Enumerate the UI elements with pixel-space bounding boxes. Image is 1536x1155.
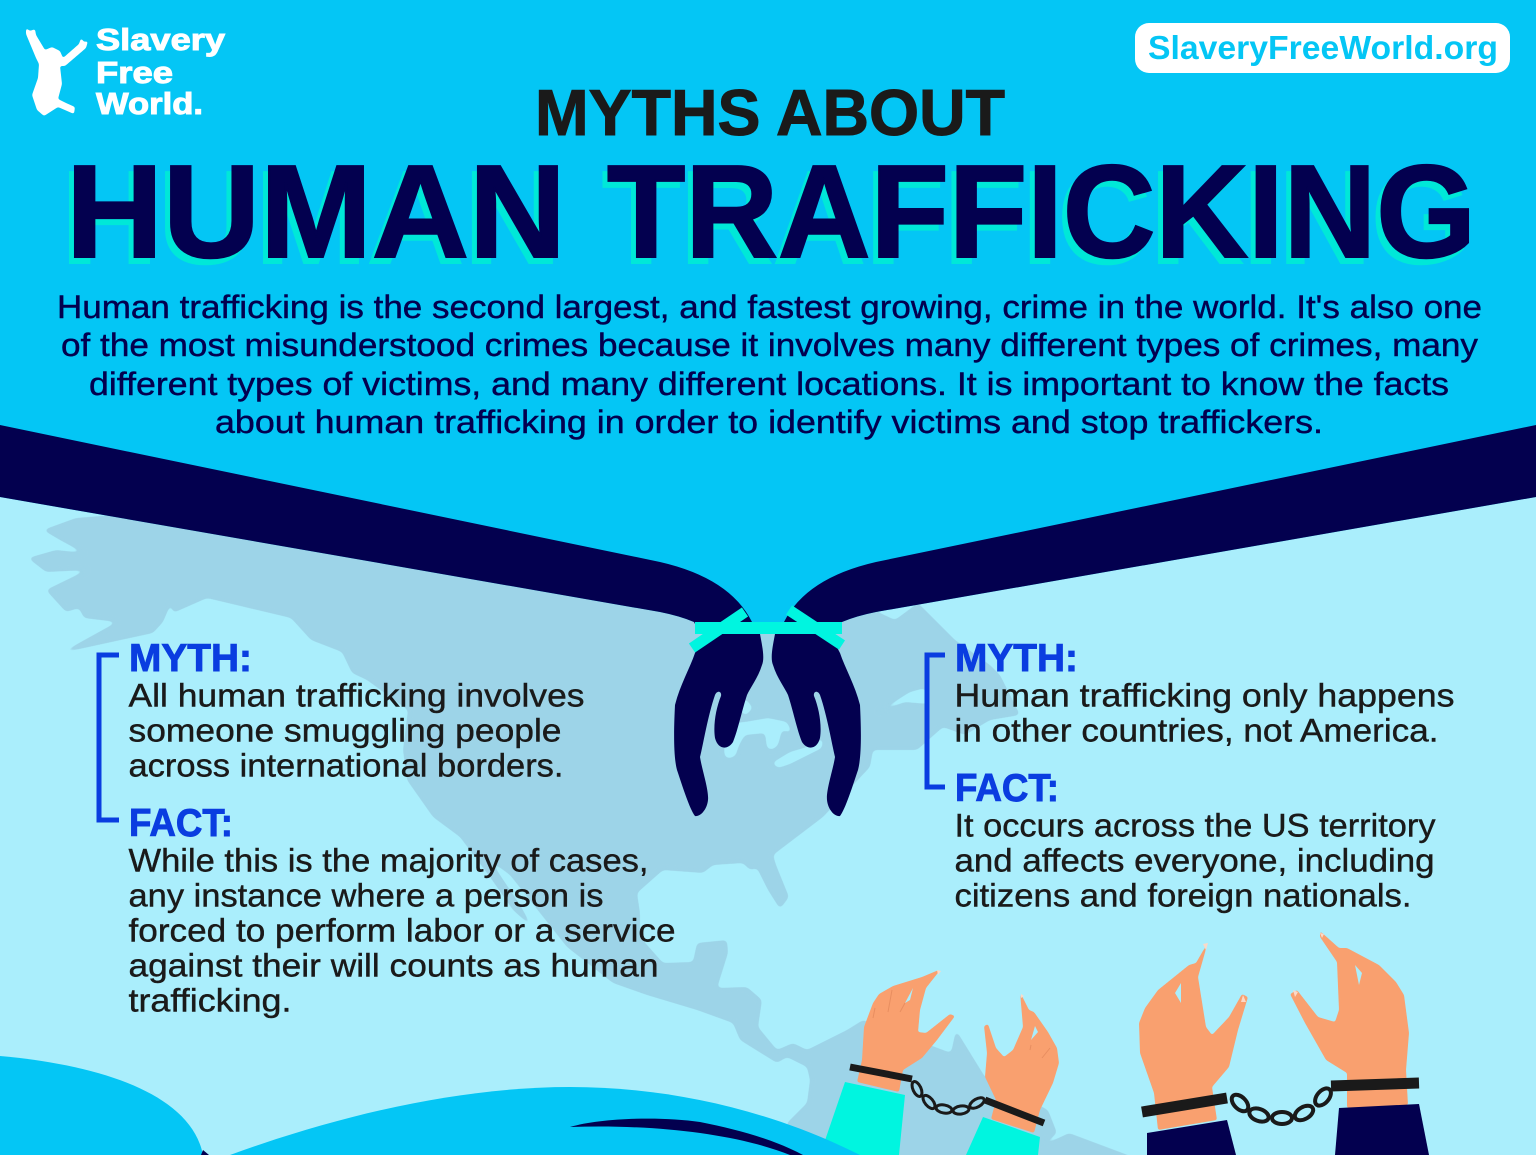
fact text: citizens and foreign nationals.: [954, 878, 1412, 914]
myth text: across international borders.: [128, 748, 564, 784]
finger gaps: [1175, 965, 1362, 1003]
myth text: [954, 678, 1454, 748]
left sleeve: [820, 1082, 905, 1155]
title: human trafficking: TRAFFICKING: [607, 138, 1476, 285]
logo wordmark: [96, 22, 226, 121]
fact text: against their will counts as human: [128, 948, 658, 984]
right arm: [784, 425, 1536, 628]
chain: [910, 1080, 986, 1115]
right hand: [984, 992, 1059, 1133]
left arm: [0, 425, 752, 628]
fact text: trafficking.: [128, 982, 292, 1018]
myth text: All human trafficking involves: [128, 678, 584, 714]
fact text: [128, 842, 676, 1018]
website pill: [1135, 23, 1510, 73]
fact text: [954, 808, 1436, 914]
left hand: [857, 969, 955, 1092]
left hand: [1139, 942, 1248, 1130]
myth text: [128, 678, 584, 784]
right hand: [1290, 931, 1409, 1108]
title: human trafficking: TRAFFICKING: [602, 144, 1471, 291]
myth text: Human trafficking only happens: [954, 678, 1454, 714]
intro paragraph: of the most misunderstood crimes because it involves many different types of crimes, many: [61, 327, 1478, 363]
cuffs: [850, 1067, 1044, 1123]
right bracket: [927, 655, 945, 787]
fact text: any instance where a person is: [128, 878, 604, 914]
fact text: forced to perform labor or a service: [128, 912, 676, 948]
rope binding: [692, 610, 842, 648]
left hand: [674, 634, 763, 816]
logo: Slavery Free World: [26, 22, 226, 121]
bound hands illustration: [0, 425, 1536, 816]
right hand: [772, 634, 861, 816]
fact text: While this is the majority of cases,: [128, 842, 648, 878]
right sleeve: [966, 1117, 1040, 1155]
handcuffed hands: large pair with navy sleeves: [937, 931, 1429, 1155]
small navy corner: [201, 1150, 209, 1155]
finger gaps: [905, 988, 1038, 1040]
sky background: [0, 0, 1536, 622]
left panel: myth one: [128, 637, 676, 1018]
fact text: and affects everyone, including: [954, 842, 1434, 878]
logo wordmark: Free: [96, 55, 173, 90]
navy swoosh: [570, 1119, 803, 1155]
logo wordmark: Slavery: [96, 22, 226, 57]
bottom left wave: [0, 1056, 203, 1155]
fact text: It occurs across the US territory: [954, 808, 1436, 844]
intro paragraph: different types of victims, and many different locations. It is important to know the facts: [89, 366, 1449, 402]
handcuffed hands: small pair with cyan sleeves: [820, 969, 1059, 1155]
left sleeve: [1147, 1120, 1236, 1155]
world map: North and Central America: [28, 500, 1141, 1155]
logo wordmark: World.: [96, 86, 203, 121]
right sleeve: [1335, 1104, 1429, 1155]
myth text: someone smuggling people: [128, 712, 562, 748]
icon: jumping figure: [26, 28, 88, 116]
fact heading: FACT:: [955, 767, 1059, 810]
bottom centre wave: [230, 1087, 860, 1155]
title: myths about: MYTHS ABOUT: [535, 76, 1005, 149]
title: human trafficking: [61, 138, 1476, 291]
cuffs: [1142, 1083, 1419, 1112]
intro paragraph: Human trafficking is the second largest, and fastest growing, crime in the world. It's also one: [57, 289, 1482, 325]
myth heading: MYTH:: [955, 637, 1078, 680]
right panel: myth two: [954, 637, 1454, 914]
website pill: SlaveryFreeWorld.org: [1148, 29, 1498, 66]
finger creases: [873, 990, 1050, 1058]
chain: [1229, 1085, 1334, 1124]
fingernails: [937, 933, 1324, 1002]
fact heading: FACT:: [129, 802, 233, 845]
title: human trafficking: HUMAN: [66, 138, 566, 285]
myth heading: MYTH:: [129, 637, 252, 680]
left bracket: [99, 655, 119, 820]
title: human trafficking: HUMAN: [61, 144, 561, 291]
myth text: in other countries, not America.: [954, 712, 1438, 748]
intro paragraph: about human trafficking in order to identify victims and stop traffickers.: [215, 404, 1323, 440]
intro paragraph: [57, 289, 1482, 440]
